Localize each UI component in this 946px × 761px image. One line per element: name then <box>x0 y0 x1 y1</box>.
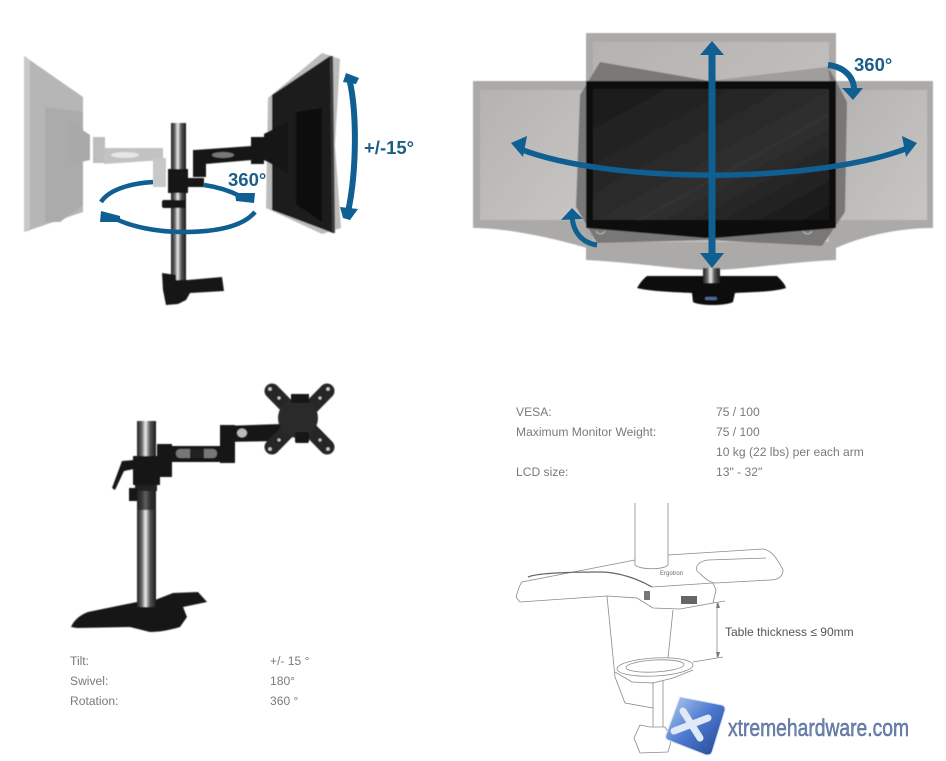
panel: side view swivel and tilt <box>24 53 414 305</box>
rotate arrows <box>561 65 863 245</box>
ghost monitors <box>473 33 933 270</box>
specs right: 13" - 32" <box>716 465 762 479</box>
specs left: 180° <box>270 674 295 688</box>
clamp and lever <box>112 456 172 501</box>
specs right: LCD size: <box>516 465 568 479</box>
specs left: Rotation: <box>70 694 118 708</box>
specs right: 10 kg (22 lbs) per each arm <box>716 445 864 459</box>
tilt arrow <box>340 73 359 220</box>
specs right: 75 / 100 <box>716 405 760 419</box>
label 360: 360° <box>854 54 892 75</box>
clamp line drawing: Ergotron <box>660 571 683 577</box>
watermark logo icon <box>666 697 725 755</box>
base <box>162 273 224 305</box>
rotated monitor ghost <box>576 62 847 246</box>
specs left <box>70 654 310 708</box>
chrome post <box>171 123 186 282</box>
arm and clamps <box>162 121 288 208</box>
main monitor <box>586 81 836 238</box>
panel: front view rotation and height <box>473 33 933 305</box>
specs left: Tilt: <box>70 654 89 668</box>
tilted monitor right <box>266 53 341 234</box>
base <box>71 592 207 632</box>
arm <box>157 424 282 465</box>
rotation arrow 360 <box>100 182 255 232</box>
specs right: VESA: <box>516 405 552 419</box>
label tilt: +/-15° <box>364 137 414 158</box>
label 360: 360° <box>228 169 266 190</box>
panel: specs and clamp drawing <box>516 405 864 753</box>
VESA plate <box>268 387 330 451</box>
clamp line drawing <box>516 503 783 753</box>
specs left: +/- 15 ° <box>270 654 310 668</box>
panel: arm product photo <box>70 387 330 708</box>
ghost arm <box>68 120 166 187</box>
small base <box>637 268 786 305</box>
cross arrows <box>511 41 917 268</box>
specs right <box>516 405 864 479</box>
specs left: 360 ° <box>270 694 299 708</box>
table thickness label: Table thickness ≤ 90mm <box>725 625 854 639</box>
post <box>137 421 156 607</box>
ghost monitor left <box>24 56 83 232</box>
specs right: 75 / 100 <box>716 425 760 439</box>
specs left: Swivel: <box>70 674 108 688</box>
specs right: Maximum Monitor Weight: <box>516 425 656 439</box>
